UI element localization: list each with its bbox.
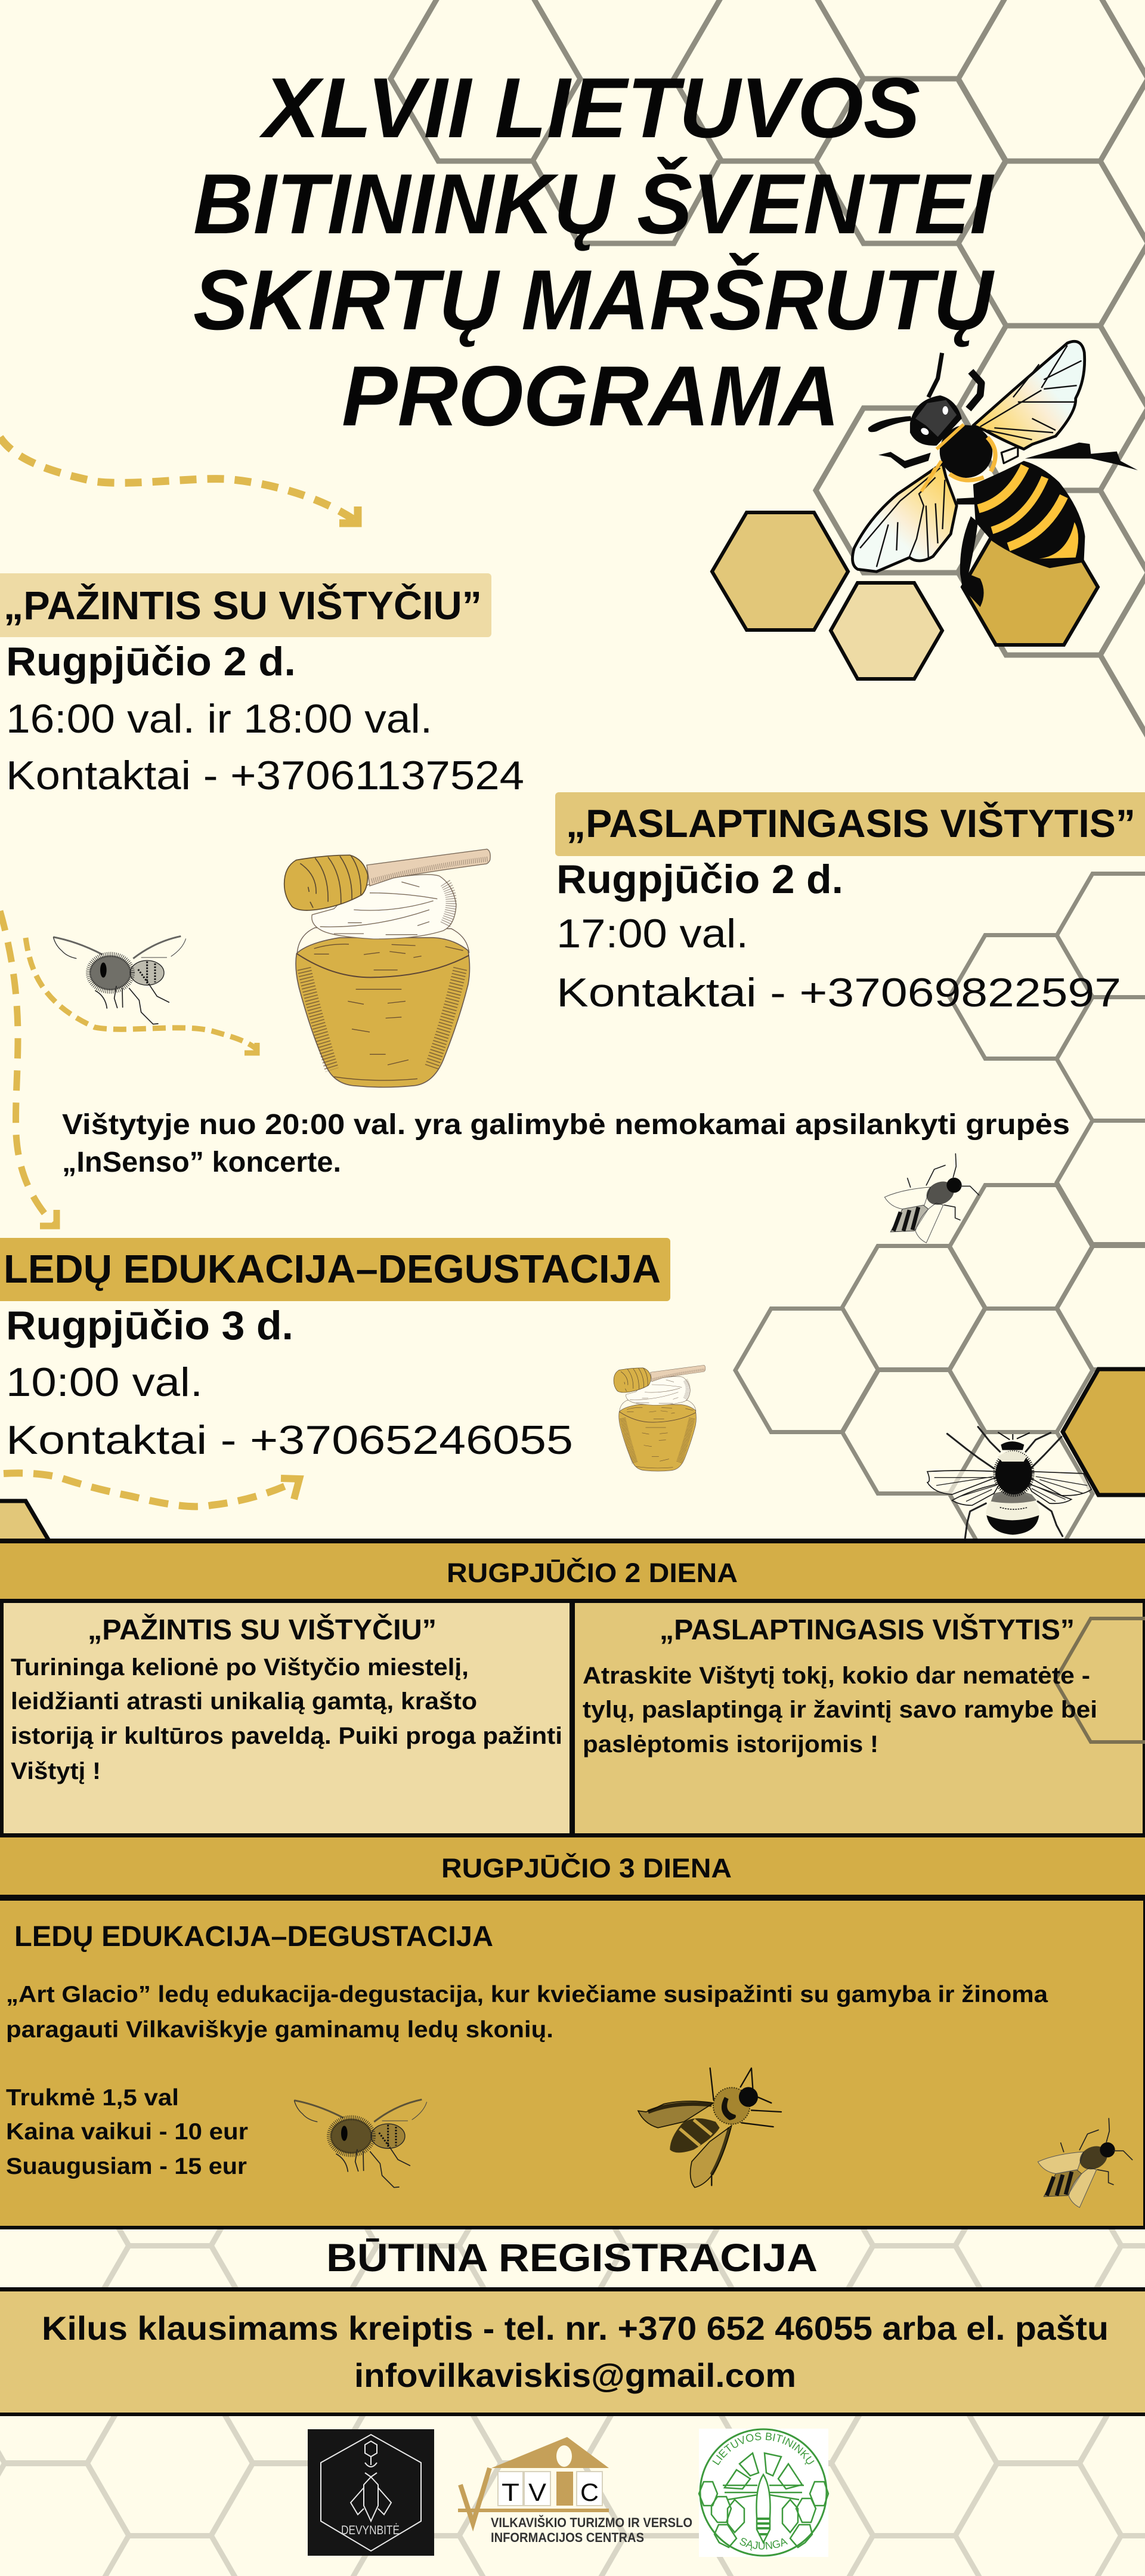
- info block: Paslaptingasis Vištytis: Kontaktai - +37069822597: [556, 970, 1121, 1015]
- cell: Paslaptingasis Vištytis: Atraskite Vištytį tokį, kokio dar nematėte -: [583, 1663, 1090, 1689]
- honeycomb: bottom faint background: [0, 2101, 1145, 2576]
- honeycomb: middle right: [735, 873, 1145, 1556]
- panel: day 3 content: paragauti Vilkaviškyje gaminamų ledų skonių.: [6, 2017, 553, 2043]
- cell: Pažintis su Vištyčiu: [4, 1603, 570, 1833]
- arrow: dashed top: [0, 437, 358, 523]
- panel: day 2 cells: [0, 1603, 1145, 1837]
- tag: Paslaptingasis Vištytis: [555, 792, 1145, 856]
- note: InSenso concert: Vištytyje nuo 20:00 val. yra galimybė nemokamai apsilankyti grupės: [62, 1109, 1070, 1141]
- panel: day 3 content: Trukmė 1,5 val: [6, 2085, 179, 2111]
- tag: Ledų edukacija: LEDŲ EDUKACIJA–DEGUSTACIJA: [4, 1247, 661, 1292]
- panel: day 3 content: Suaugusiam - 15 eur: [6, 2154, 247, 2179]
- logo: Lietuvos bitininkų sąjunga: SĄJUNGA: [739, 2538, 788, 2551]
- info block: Ledų edukacija: [6, 1303, 573, 1463]
- panel: day 3 header: [0, 1837, 1145, 1895]
- icon: honey jar large: [284, 849, 490, 1087]
- info block: Paslaptingasis Vištytis: [556, 857, 1121, 1015]
- note: InSenso concert: [62, 1109, 1070, 1178]
- panel: day 3 header: RUGPJŪČIO 3 DIENA: [441, 1853, 732, 1883]
- title: PROGRAMA: [342, 349, 840, 444]
- icon: gold hexagon right edge: [1063, 1369, 1145, 1495]
- panel: contacts: [0, 2287, 1145, 2416]
- heading: Būtina registracija: BŪTINA REGISTRACIJA: [326, 2235, 818, 2280]
- arrow: dashed lower: [4, 1473, 299, 1506]
- cell: Pažintis su Vištyčiu: Turininga kelionė po Vištyčio miestelį,: [11, 1654, 469, 1681]
- panel: day 3 content: „Art Glacio” ledų edukacija-degustacija, kur kviečiame susipažinti su gamyba ir žinoma: [6, 1982, 1048, 2007]
- logo: Devynbitė: DEVYNBITĖ: [341, 2524, 400, 2537]
- info block: Pažintis su Vištyčiu: Rugpjūčio 2 d.: [6, 639, 296, 684]
- tag: Paslaptingasis Vištytis: „PASLAPTINGASIS VIŠTYTIS”: [566, 801, 1135, 845]
- info block: Pažintis su Vištyčiu: [6, 639, 524, 798]
- cell: Pažintis su Vištyčiu: leidžianti atrasti unikalią gamtą, krašto: [11, 1688, 477, 1715]
- title: XLVII LIETUVOS: [259, 61, 920, 156]
- arrow: dashed long vertical: [0, 911, 57, 1226]
- panel: day 3 content: Kaina vaikui - 10 eur: [6, 2119, 248, 2145]
- logo: TVIC: T: [502, 2478, 519, 2506]
- arrow: dashed middle: [26, 938, 258, 1053]
- info block: Ledų edukacija: Rugpjūčio 3 d.: [6, 1303, 293, 1348]
- icon: bumblebee sketch: [927, 1427, 1091, 1538]
- logo: TVIC: VILKAVIŠKIO TURIZMO IR VERSLO: [491, 2515, 692, 2530]
- honeycomb: top right: [391, 0, 1145, 737]
- cell: Paslaptingasis Vištytis: paslėptomis istorijomis !: [583, 1731, 878, 1758]
- tag: Pažintis su Vištyčiu: [0, 573, 491, 637]
- title: [193, 61, 995, 444]
- logo: TVIC: INFORMACIJOS CENTRAS: [491, 2530, 644, 2545]
- icon: flying bee on panel: [638, 2068, 781, 2188]
- icon: honey jar small: [614, 1365, 705, 1471]
- icon: large coloured bee: [852, 341, 1138, 607]
- icon: small bee sketch: [884, 1154, 979, 1243]
- info block: Paslaptingasis Vištytis: Rugpjūčio 2 d.: [556, 857, 843, 902]
- panel: contacts: infovilkaviskis@gmail.com: [354, 2356, 796, 2394]
- logo: Lietuvos bitininkų sąjunga: [698, 2428, 829, 2557]
- logo: Devynbitė: [308, 2429, 434, 2556]
- title: SKIRTŲ MARŠRUTŲ: [193, 252, 995, 348]
- panel: day 2 header: [0, 1539, 1145, 1604]
- logo: TVIC: C: [580, 2478, 599, 2506]
- icon: fuzzy bee sketch: [53, 936, 186, 1024]
- panel: day 2 header: RUGPJŪČIO 2 DIENA: [447, 1558, 738, 1588]
- tag: Ledų edukacija: [0, 1238, 670, 1301]
- info block: Pažintis su Vištyčiu: Kontaktai - +37061137524: [6, 753, 524, 798]
- title: BITININKŲ ŠVENTEI: [193, 156, 995, 252]
- info block: Ledų edukacija: Kontaktai - +37065246055: [6, 1417, 573, 1463]
- cell: Pažintis su Vištyčiu: Vištytį !: [11, 1758, 101, 1784]
- tag: Pažintis su Vištyčiu: „PAŽINTIS SU VIŠTYČIU”: [4, 583, 482, 628]
- cell: Pažintis su Vištyčiu: istoriją ir kultūros paveldą. Puiki proga pažinti: [11, 1723, 562, 1749]
- cell: Paslaptingasis Vištytis: tylų, paslaptingą ir žavintį savo ramybe bei: [583, 1697, 1097, 1723]
- icon: corner hexagon left: [0, 1501, 54, 1549]
- cell: Paslaptingasis Vištytis: „PASLAPTINGASIS VIŠTYTIS”: [660, 1613, 1075, 1646]
- icon: small bee on panel: [1038, 2118, 1132, 2207]
- panel: day 3 content: [0, 1895, 1145, 2229]
- note: InSenso concert: „InSenso” koncerte.: [62, 1147, 341, 1178]
- panel: day 3 content: LEDŲ EDUKACIJA–DEGUSTACIJA: [14, 1921, 493, 1953]
- logo: Lietuvos bitininkų sąjunga: LIETUVOS BITININKŲ: [712, 2433, 815, 2465]
- info block: Paslaptingasis Vištytis: 17:00 val.: [556, 911, 748, 956]
- panel: contacts: Kilus klausimams kreiptis - tel. nr. +370 652 46055 arba el. paštu: [42, 2309, 1109, 2347]
- cell: Paslaptingasis Vištytis: [575, 1603, 1145, 1833]
- info block: Pažintis su Vištyčiu: 16:00 val. ir 18:00 val.: [6, 696, 432, 742]
- cell: Pažintis su Vištyčiu: „PAŽINTIS SU VIŠTYČIU”: [88, 1613, 437, 1646]
- info block: Ledų edukacija: 10:00 val.: [6, 1360, 203, 1405]
- logo: TVIC: [458, 2437, 692, 2545]
- icon: three coloured hexagons: [712, 512, 1098, 679]
- icon: fuzzy bee on panel: [294, 2099, 427, 2188]
- logo: TVIC: V: [528, 2478, 546, 2506]
